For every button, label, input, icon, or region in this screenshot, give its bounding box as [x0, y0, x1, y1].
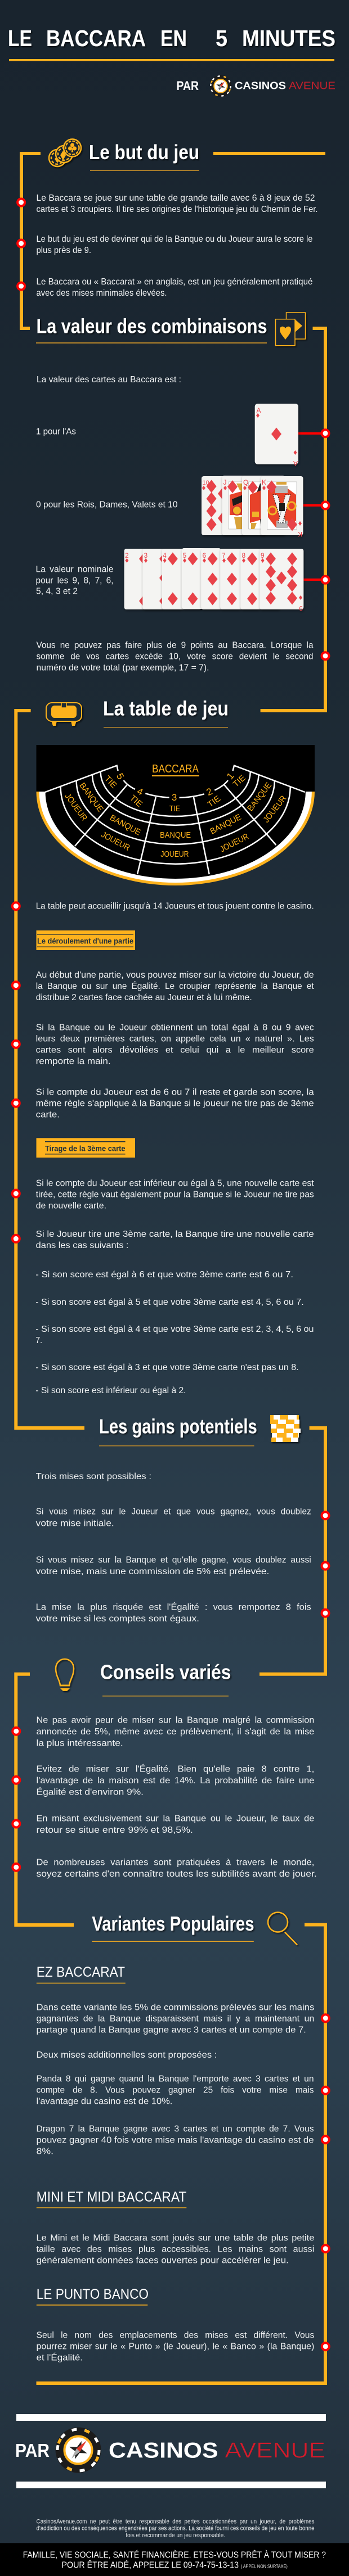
disclaimer: d'addiction ou des conséquences engendrées par ses actions. La société fourni ces conseils de jeu en toute bonne [36, 2525, 314, 2532]
text: Mini et Midi rules: Le Mini et le Midi Baccara sont joués sur une table de plus petite [36, 2234, 314, 2243]
subheading: EZ Baccarat: EZ BACCARAT [37, 1964, 125, 1980]
text: Dragon 7: pouvez gagner 40 fois votre mise mais l'avantage du casino est de [36, 2136, 314, 2145]
label box: tirage [36, 1138, 135, 1158]
panel: conseils variés [12, 1659, 317, 1925]
text: tie bet: La mise la plus risquée est l'Égalité : vous remportez 8 fois [36, 1601, 311, 1612]
text: stakes [36, 277, 313, 298]
header [8, 25, 335, 97]
text: bank bet [36, 1555, 311, 1576]
playing cards: two to nine [124, 548, 303, 612]
text: Panda 8: Panda 8 qui gagne quand la Banque l'emporte avec 3 cartes et un [36, 2075, 314, 2084]
title [8, 25, 335, 51]
text: five or less [36, 1178, 314, 1210]
text: Mini et Midi rules: taille avec des mises plus accessibles. Les mains sont aussi [36, 2245, 314, 2254]
list: bank third card cases: 7. [35, 1336, 42, 1345]
text: return rate [36, 1814, 314, 1835]
chart: baccarat table layout: JOUEUR [261, 794, 288, 825]
subheading: Mini et Midi Baccarat: MINI ET MIDI BACCARAT [37, 2189, 186, 2205]
icon: chip stacks [270, 1415, 301, 1442]
text: third card [36, 1230, 314, 1250]
king: K [262, 478, 266, 486]
text: Punto Banco rules: Seul le nom des emplacements des mises est différent. Vous [36, 2330, 314, 2340]
heading: La valeur des combinaisons [36, 315, 267, 338]
icon: cards [276, 313, 305, 346]
icon: magnifier [268, 1913, 297, 1945]
five [182, 548, 221, 609]
text: tie bet [36, 1601, 311, 1624]
chart: baccarat table layout: BACCARA [152, 763, 199, 775]
text: goal: Le but du jeu est de deviner qui de la Banque ou du Joueur aura le score le [36, 234, 313, 244]
chart: baccarat table layout: BANQUE [208, 812, 243, 837]
text: six or seven [36, 1087, 314, 1119]
chart: baccarat table layout: TIE [169, 804, 180, 814]
timeline frame [261, 328, 325, 711]
text: EZ Baccarat rules: gagnantes de la Banque disparaissent mais il y a maintenant un [36, 2014, 314, 2024]
label box: tirage: Tirage de la 3ème carte [45, 1144, 126, 1153]
text: naturel: remporte la main. [36, 1056, 111, 1066]
text: five or less: de nouvelle carte. [36, 1201, 106, 1210]
king: K [298, 530, 302, 538]
playing card: ace: A [293, 459, 298, 467]
text: intro: La valeur des cartes au Baccara est : [37, 375, 181, 385]
text: bank bet: Si vous misez sur la Banque et qu'elle gagne, vous doublez aussi [36, 1555, 311, 1565]
byline logo: PAR [177, 79, 199, 93]
text: naturel [36, 1023, 314, 1066]
text: naturel: cartes sont alors dévoilées et celui qui a le meilleur score [36, 1045, 314, 1055]
text: bank advice [36, 1715, 314, 1748]
timeline dots [17, 199, 25, 290]
text: start of the round: la Banque ou sur une Égalité. Le croupier représente la Banque et [36, 980, 314, 991]
chart: baccarat table layout: JOUEUR [160, 849, 189, 859]
timeline dots [322, 2014, 329, 2350]
text: start of the round: Au début d'une partie, vous pouvez miser sur la victoire du Joueur, de [36, 970, 314, 980]
text: table and origins: Le Baccara se joue sur une table de grande taille avec 6 à 8 jeux de 52 [36, 193, 315, 203]
playing cards: ten and court cards [202, 476, 303, 538]
text: bank bet: votre mise, mais une commission de 5% est prélevée. [36, 1567, 269, 1576]
text: EZ Baccarat rules [36, 2003, 314, 2035]
text: player bet [36, 1507, 311, 1528]
byline logo: AVENUE [289, 80, 335, 92]
icon: light bulb [56, 1659, 74, 1691]
queen: Q [243, 478, 248, 486]
three: 3 [144, 552, 147, 559]
nine [259, 549, 303, 612]
ten: 10 [203, 480, 209, 486]
chart: baccarat table layout: JOUEUR [218, 831, 250, 855]
text: Panda 8: l'avantage du casino est de 10%. [36, 2097, 172, 2107]
jack: J [223, 478, 226, 486]
chart: baccarat table layout: TIE [102, 774, 119, 790]
text: nominal value [36, 564, 114, 596]
panel: le but du jeu [17, 139, 325, 328]
eight: 8 [242, 552, 245, 559]
disclaimer: fois et recommande un jeu responsable. [126, 2532, 225, 2539]
connectors [298, 432, 322, 581]
heading underline [99, 1445, 254, 1446]
text: variants worldwide: soyez certains d'en connaître toutes les subtilités avant de jouer. [36, 1869, 317, 1879]
panel: les gains potentiels [36, 1414, 329, 1674]
chart: baccarat table layout: JOUEUR [100, 830, 132, 853]
text: bank advice: annoncée de 5%, même avec ce prélèvement, il s'agit de la mise [36, 1727, 314, 1737]
text: avoid the tie: l'avantage de la maison est de 14%. La probabilité de faire une [36, 1776, 314, 1786]
text: capacity: La table peut accueillir jusqu'à 14 Joueurs et tous jouent contre le casino. [36, 902, 314, 911]
seven: 7 [222, 552, 226, 559]
list: bank third card cases [35, 1270, 314, 1395]
helpline band: ( APPEL NON SURTAXÉ) [241, 2564, 288, 2569]
byline logo [177, 75, 335, 97]
text: nominal value: La valeur nominale [36, 564, 114, 574]
text: nine point limit [36, 641, 314, 673]
eight [240, 549, 280, 609]
list: bank third card cases: - Si son score est égal à 6 et que votre 3ème carte est 6 ou 7. [35, 1270, 293, 1280]
text: bank advice: Ne pas avoir peur de miser sur la Banque malgré la commission [36, 1715, 314, 1725]
text: five or less: tirée, cette règle vaut également pour la Banque si le Joueur ne tire pas [36, 1190, 314, 1199]
title: LE [8, 25, 32, 51]
heading underline [102, 1696, 229, 1697]
timeline frame [16, 711, 84, 1428]
title: BACCARA [46, 25, 146, 51]
title: MINUTES [242, 25, 335, 51]
icon: table [46, 703, 82, 726]
label box: déroulement: Le déroulement d'une partie [37, 936, 133, 945]
heading: Les gains potentiels [99, 1414, 257, 1438]
text: Dragon 7: 8%. [36, 2147, 53, 2157]
text: stakes: Le Baccara ou « Baccarat » en anglais, est un jeu généralement pratiqué [36, 277, 313, 287]
text: stakes: avec des mises minimales élevées. [36, 288, 167, 298]
heading: Conseils variés [100, 1661, 231, 1684]
text: avoid the tie: Égalité est d'environ 9%. [36, 1787, 144, 1797]
heading rule right [213, 152, 325, 155]
heading: Le but du jeu [89, 141, 199, 164]
disclaimer: CasinosAvenue.com ne peut être tenu responsable des pertes occasionnées par un joueur, de problèmes [36, 2518, 315, 2525]
text: Punto Banco rules [36, 2330, 314, 2362]
text: variants worldwide [36, 1858, 317, 1879]
heading underline [90, 170, 199, 171]
heading underline [36, 342, 267, 344]
timeline dots [12, 902, 20, 1242]
chart: baccarat table layout [36, 745, 315, 885]
panel: la valeur des combinaisons [36, 313, 329, 711]
footer logo band [15, 2414, 326, 2488]
title: 5 [216, 25, 227, 51]
text: Dragon 7 [36, 2125, 314, 2157]
icon: chips [49, 139, 81, 166]
text: faces value: 0 pour les Rois, Dames, Valets et 10 [36, 500, 178, 510]
text: Dragon 7: Dragon 7 la Banque gagne avec 3 cartes et un compte de 7. Vous [36, 2125, 314, 2134]
text: Mini et Midi rules [36, 2234, 314, 2266]
helpline band [0, 2543, 349, 2576]
text: additional bets: Deux mises additionnelles sont proposées : [36, 2050, 217, 2060]
timeline dots [322, 1512, 329, 1617]
disclaimer [36, 2518, 315, 2539]
chart: baccarat table layout: 3 [172, 792, 177, 803]
seven [220, 549, 259, 609]
chart: baccarat table layout: JOUEUR [63, 792, 89, 823]
text: third card: Si le Joueur tire une 3ème carte, la Banque tire une nouvelle carte [36, 1230, 314, 1239]
text: naturel: leurs deux premières cartes, on appelle cela un « naturel ». Les [36, 1034, 314, 1043]
logo: AVENUE [225, 2439, 325, 2463]
text: return rate: En misant exclusivement sur la Banque ou le Joueur, le taux de [36, 1814, 314, 1823]
chart: baccarat table layout: 5 [114, 771, 126, 781]
four [162, 549, 202, 609]
timeline dots [12, 1728, 20, 1871]
text: table and origins [36, 193, 317, 214]
logo [15, 2428, 325, 2473]
queen [242, 476, 285, 535]
text: return rate: retour se situe entre 99% et 98,5%. [36, 1825, 193, 1835]
text: EZ Baccarat rules: Dans cette variante les 5% de commissions prélevés sur les mains [36, 2003, 314, 2013]
text: six or seven: carte. [36, 1110, 60, 1119]
text: nine point limit: somme de vos cartes excède 10, votre score devient le second [36, 652, 313, 662]
text: goal: plus près de 9. [36, 246, 91, 255]
playing card: ace [255, 404, 298, 467]
logo: CASINOS [109, 2439, 218, 2463]
nine: 9 [261, 552, 265, 559]
two: 2 [125, 552, 129, 559]
byline logo: CASINOS [235, 80, 286, 92]
subheading: Le Punto Banco: LE PUNTO BANCO [37, 2286, 149, 2302]
text: Panda 8 [36, 2075, 314, 2107]
heading underline [92, 1941, 254, 1942]
panel: variantes populaires [36, 1912, 329, 2383]
text: goal [36, 234, 313, 255]
nine: 9 [299, 604, 303, 612]
timeline frame [36, 1925, 325, 2383]
six: 6 [203, 552, 206, 559]
timeline dots [322, 430, 329, 659]
panel: la table de jeu [12, 697, 315, 1428]
timeline frame [259, 1428, 325, 1674]
text: three bets: Trois mises sont possibles : [36, 1472, 151, 1481]
six [201, 549, 240, 609]
text: start of the round [36, 970, 314, 1002]
heading: La table de jeu [103, 697, 229, 720]
text: bank advice: la plus intéressante. [36, 1739, 123, 1748]
text: nine point limit: numéro de votre total (par exemple, 17 = 7). [36, 663, 209, 673]
list: bank third card cases: - Si son score est inférieur ou égal à 2. [35, 1386, 186, 1395]
three [142, 549, 182, 609]
title: EN [160, 25, 187, 51]
text: Punto Banco rules: et l'Égalité. [36, 2352, 83, 2362]
title rule [9, 59, 334, 61]
jack [222, 476, 265, 535]
label box: déroulement [36, 930, 135, 950]
text: six or seven: même règle s'applique à la Banque si le joueur ne tire pas de 3ème [36, 1099, 314, 1108]
chart: baccarat table layout: BANQUE [160, 830, 191, 840]
text: nine point limit: Vous ne pouvez pas faire plus de 9 points au Baccara. Lorsque la [36, 641, 314, 650]
king [261, 476, 303, 538]
text: tie bet: votre mise si les comptes sont égaux. [36, 1614, 199, 1624]
helpline band: POUR ÊTRE AIDÉ, APPELEZ LE 09-74-75-13-13 [62, 2559, 239, 2570]
heading: Variantes Populaires [92, 1912, 254, 1935]
text: Mini et Midi rules: généralement données faces ouvertes pour accélérer le jeu. [36, 2256, 289, 2266]
list: bank third card cases: - Si son score est égal à 3 et que votre 3ème carte n'est pas un 8. [35, 1363, 299, 1372]
chart: baccarat table layout: 2 [205, 786, 214, 798]
playing card: ace: A [257, 406, 261, 414]
chart: baccarat table layout: TIE [128, 793, 144, 809]
text: EZ Baccarat rules: partage quand la Banque gagne avec 3 cartes et un compte de 7. [36, 2026, 306, 2035]
chart: baccarat table layout: BANQUE [245, 780, 274, 813]
timeline frame [21, 153, 41, 328]
two [124, 549, 164, 609]
text: nominal value: 5, 4, 3 et 2 [36, 587, 78, 596]
text: six or seven: Si le compte du Joueur est de 6 ou 7 il reste et garde son score, la [36, 1087, 314, 1097]
text: player bet: Si vous misez sur le Joueur et que vous gagnez, vous doublez [36, 1507, 311, 1517]
text: Punto Banco rules: pourrez miser sur le « Punto » (le Joueur), le « Banco » (la Banque) [36, 2342, 314, 2351]
text: avoid the tie [36, 1763, 314, 1797]
logo: PAR [15, 2440, 50, 2461]
list: bank third card cases: - Si son score est égal à 4 et que votre 3ème carte est 2, 3, 4, 5, 6 ou [35, 1325, 314, 1334]
chart: baccarat table layout: 1 [225, 771, 236, 781]
text: table and origins: cartes et 3 croupiers. Il tire ses origines de l'historique jeu du Chemin de Fer. [36, 205, 317, 214]
text: ace value: 1 pour l'As [36, 427, 76, 437]
chart: baccarat table layout: TIE [231, 773, 248, 789]
chart: baccarat table layout: 4 [135, 786, 145, 798]
text: naturel: Si la Banque ou le Joueur obtiennent un total égal à 8 ou 9 avec [36, 1023, 314, 1032]
text: start of the round: distribue 2 cartes face cachée au Joueur et à lui même. [36, 993, 252, 1002]
text: nominal value: pour les 9, 8, 7, 6, [36, 576, 114, 585]
text: third card: dans les cas suivants : [36, 1241, 129, 1250]
five: 5 [182, 552, 187, 559]
text: avoid the tie: Evitez de miser sur l'Égalité. Bien qu'elle paie 8 contre 1, [36, 1763, 314, 1774]
chart: baccarat table layout: BANQUE [108, 813, 142, 838]
list: bank third card cases: - Si son score est égal à 5 et que votre 3ème carte est 4, 5, 6 ou 7. [35, 1298, 304, 1307]
ten [202, 476, 244, 535]
text: player bet: votre mise initiale. [36, 1519, 114, 1528]
text: five or less: Si le compte du Joueur est inférieur ou égal à 5, une nouvelle carte est [36, 1178, 314, 1188]
text: variants worldwide: De nombreuses variantes sont pratiquées à travers le monde, [36, 1858, 314, 1867]
chart: baccarat table layout: BANQUE [77, 781, 105, 814]
timeline frame [16, 1674, 74, 1925]
four: 4 [163, 552, 167, 559]
text: Panda 8: compte de 8. Vous pouvez gagner 25 fois votre mise mais [36, 2086, 314, 2095]
chart: baccarat table layout: TIE [206, 794, 222, 810]
